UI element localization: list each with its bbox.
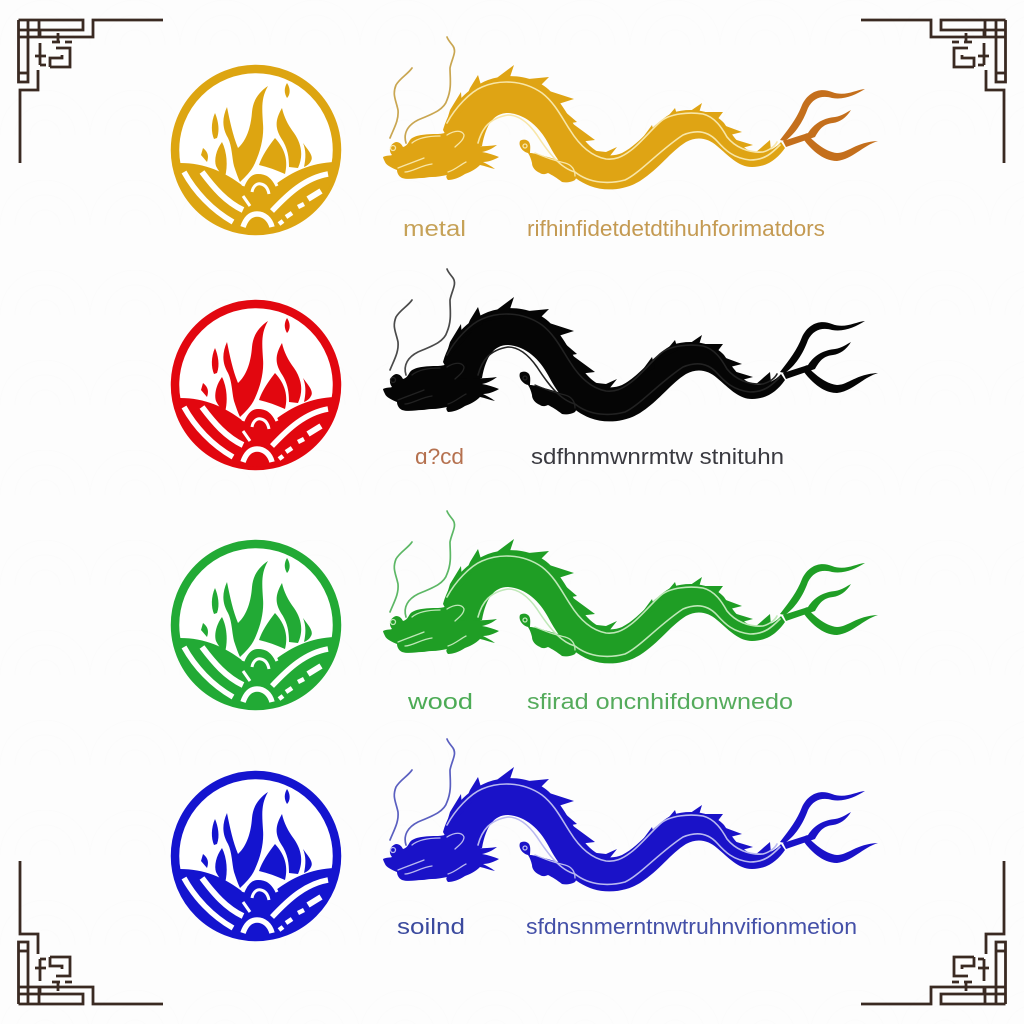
row: red xyxy=(175,269,878,475)
row: wood xyxy=(175,511,878,715)
dragon: metal xyxy=(383,37,878,189)
dragon: black xyxy=(383,269,878,421)
row: metal xyxy=(175,37,878,241)
row: blue xyxy=(175,739,878,946)
label: wood: wood xyxy=(407,689,473,714)
description: metal: rifhinfidetdetdtihuhforimatdors xyxy=(527,216,825,241)
icon: red flame emblem xyxy=(175,304,340,475)
label: red: ɑ?cd xyxy=(415,444,464,469)
description: blue: sfdnsnmerntnwtruhnvifionmetion xyxy=(526,914,857,939)
corner ornament: bottom right xyxy=(861,861,1006,1004)
icon: blue flame emblem xyxy=(175,775,340,946)
icon: metal flame emblem xyxy=(175,69,340,240)
description: red: sdfhnmwnrmtw stnituhn xyxy=(531,444,784,469)
corner ornament: top right xyxy=(861,20,1006,163)
dragon: green xyxy=(383,511,878,663)
description: wood: sfirad oncnhifdonwnedo xyxy=(527,689,793,714)
dragon: blue xyxy=(383,739,878,891)
label: metal: metal xyxy=(403,216,466,241)
label: blue: soilnd xyxy=(397,914,465,939)
corner ornament: bottom left xyxy=(18,861,163,1004)
corner ornament: top left xyxy=(18,20,163,163)
icon: green flame emblem xyxy=(175,544,340,715)
